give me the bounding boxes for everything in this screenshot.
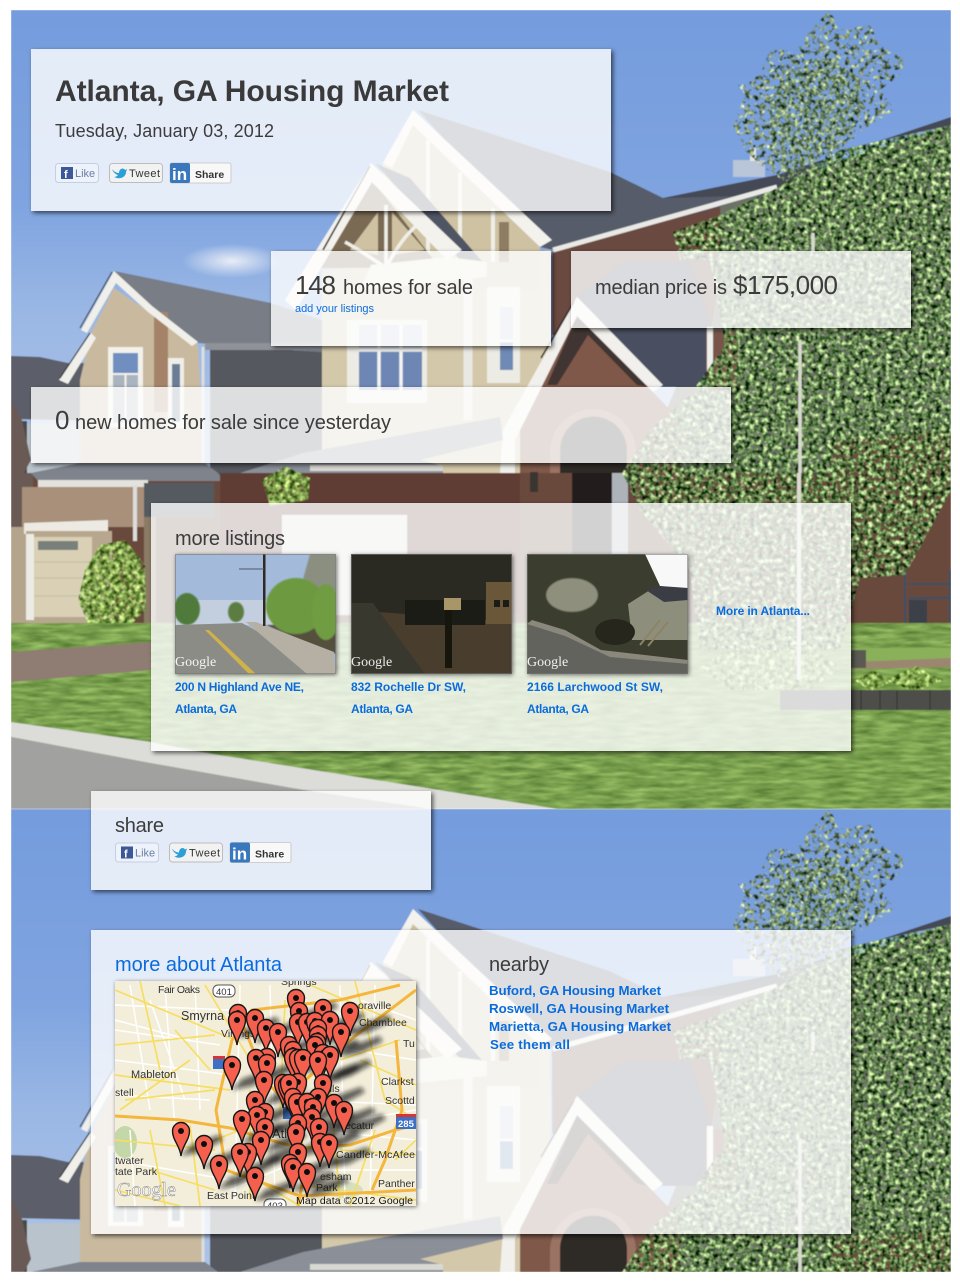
map place labels: Chamblee	[359, 1017, 407, 1029]
background photo: suburban house	[11, 10, 951, 809]
panel: new homes	[31, 387, 731, 463]
map place labels: Fair Oaks	[158, 984, 200, 996]
map place labels: Park	[316, 1182, 338, 1194]
listing photo 1	[174, 554, 340, 674]
map place labels: Scottd	[385, 1095, 415, 1107]
listing 3 address	[527, 680, 663, 716]
map place labels: Clarkst	[381, 1076, 414, 1088]
listing pins	[172, 990, 358, 1201]
panel: more about Atlanta	[91, 930, 851, 1234]
map place labels: tate Park	[115, 1166, 158, 1178]
social share buttons	[116, 842, 291, 864]
share heading: share	[115, 815, 164, 837]
pin shadows	[181, 1002, 392, 1201]
listing photo 3 watermark: Google	[527, 655, 568, 670]
new homes text	[55, 405, 391, 435]
map place labels: East Point	[207, 1190, 255, 1202]
more listings heading: more listings	[175, 528, 285, 550]
panel: homes for sale	[271, 251, 551, 346]
listing 3 address: Atlanta, GA	[527, 702, 589, 716]
highway shields: 285	[398, 1119, 415, 1130]
panel: share	[91, 791, 431, 890]
panel: title	[31, 49, 611, 211]
map watermark: Google	[117, 1179, 176, 1201]
map place labels: stell	[115, 1087, 134, 1099]
map of listings	[113, 976, 416, 1212]
listing 2 address: 832 Rochelle Dr SW,	[351, 680, 466, 694]
listing 3 address: 2166 Larchwood St SW,	[527, 680, 663, 694]
map place labels: ecatur	[345, 1120, 375, 1132]
panel: median price	[571, 251, 911, 328]
listing photo 1 watermark: Google	[175, 655, 216, 670]
nearby links: See them all	[490, 1037, 570, 1052]
homes for sale count: 148	[295, 270, 336, 300]
map place labels	[115, 976, 415, 1202]
map place labels: oraville	[358, 1000, 391, 1012]
highway shields: 403	[267, 1201, 283, 1212]
map place labels: Atl	[272, 1126, 287, 1141]
median price text: median price is	[595, 277, 727, 299]
nearby links: Roswell, GA Housing Market	[489, 1001, 670, 1016]
panel: more listings	[151, 503, 851, 751]
new homes text: new homes for sale since yesterday	[75, 412, 391, 434]
listing photo 2	[351, 554, 512, 674]
add your listings link: add your listings	[295, 303, 374, 315]
title: Atlanta, GA Housing Market	[55, 75, 449, 108]
listing 1 address: Atlanta, GA	[175, 702, 237, 716]
map attribution: Map data ©2012 Google	[296, 1195, 413, 1207]
nearby links: Buford, GA Housing Market	[489, 983, 662, 998]
listing 1 address: 200 N Highland Ave NE,	[175, 680, 304, 694]
highway shields: 401	[216, 987, 232, 998]
social share buttons	[56, 163, 231, 184]
homes for sale count	[295, 270, 473, 300]
map place labels: Vinings	[221, 1028, 255, 1040]
map place labels: Panther	[378, 1178, 415, 1190]
map place labels: Smyrna	[181, 1009, 224, 1023]
date: Tuesday, January 03, 2012	[55, 121, 274, 141]
new homes text: 0	[55, 405, 69, 435]
more about Atlanta heading: more about Atlanta	[115, 954, 283, 976]
map place labels: esham	[320, 1171, 352, 1183]
nearby links: Marietta, GA Housing Market	[489, 1019, 672, 1034]
nearby heading: nearby	[489, 954, 549, 976]
median price text	[595, 270, 838, 300]
map place labels: twater	[115, 1155, 144, 1167]
map place labels: Mableton	[131, 1069, 176, 1081]
listing photo 3	[527, 554, 688, 674]
map place labels: Tu	[403, 1038, 415, 1050]
highway shields	[213, 985, 416, 1212]
nearby links	[489, 983, 672, 1052]
listing photo 2 watermark: Google	[351, 655, 392, 670]
map place labels: Springs	[281, 976, 317, 988]
listing 2 address: Atlanta, GA	[351, 702, 413, 716]
homes for sale count: homes for sale	[343, 277, 473, 299]
more in Atlanta link: More in Atlanta...	[716, 604, 810, 618]
listing 1 address	[175, 680, 304, 716]
background photo: repeated house tile	[11, 809, 951, 1272]
map place labels: lills	[325, 1083, 340, 1095]
median price text: $175,000	[733, 270, 838, 300]
map place labels: Candler-McAfee	[336, 1149, 415, 1161]
listing 2 address	[351, 680, 466, 716]
